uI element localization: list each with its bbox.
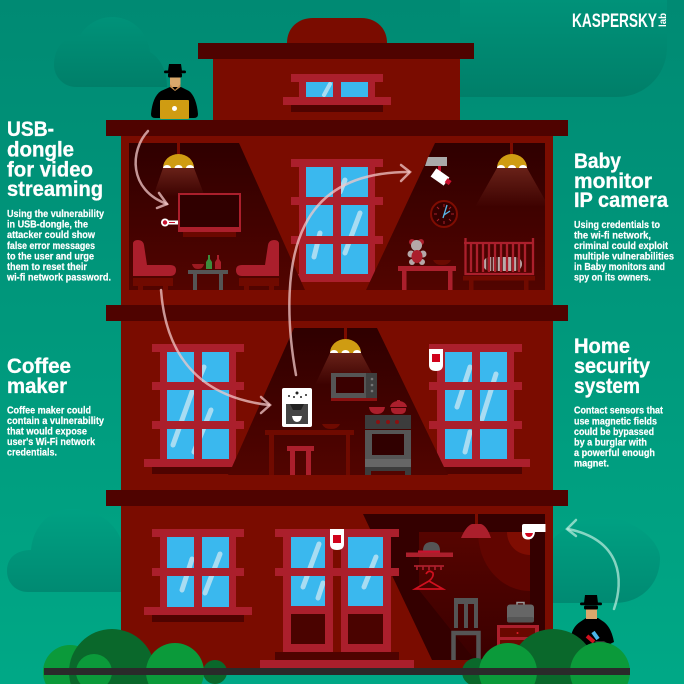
heading: coffee maker bbox=[7, 355, 71, 398]
text: home security description bbox=[574, 406, 664, 470]
text: baby monitor description bbox=[574, 220, 674, 284]
wall clock bbox=[431, 201, 457, 227]
roof dome bbox=[287, 18, 387, 43]
upper storey wall bbox=[213, 59, 460, 120]
right armchair bbox=[236, 240, 279, 290]
text: USB-dongle description: them to reset their bbox=[7, 262, 87, 273]
heading: USB-dongle: for video bbox=[7, 158, 93, 182]
window: middle floor left bbox=[144, 344, 252, 474]
text: baby monitor description: the wi-fi network, bbox=[574, 230, 651, 242]
heading: coffee maker: maker bbox=[7, 375, 67, 398]
icon: ip camera bbox=[425, 157, 452, 186]
coat rack bbox=[414, 566, 444, 589]
crib bbox=[463, 238, 535, 290]
icon: door sensor bbox=[330, 529, 344, 550]
cloud: top right bbox=[460, 0, 667, 97]
stool bbox=[287, 446, 314, 475]
text: coffee maker description: that would expose bbox=[7, 426, 88, 438]
text: home security description: use magnetic fields bbox=[574, 416, 657, 428]
stove with pots bbox=[365, 400, 411, 475]
text: USB-dongle description: attacker could show bbox=[7, 230, 95, 241]
nursery lamp bbox=[475, 143, 545, 207]
main wall bbox=[121, 135, 553, 670]
room: kitchen bbox=[228, 328, 448, 475]
heading: home security: system bbox=[574, 375, 640, 398]
chair bbox=[454, 598, 478, 660]
bushes: right bbox=[462, 629, 630, 684]
logo: lab bbox=[658, 13, 669, 27]
text: USB-dongle description: Using the vulnerability bbox=[7, 209, 105, 220]
text: baby monitor description: in Baby monitors and bbox=[574, 262, 665, 273]
arrow: tv to coffee maker bbox=[161, 290, 270, 413]
floor band 2 bbox=[106, 305, 568, 321]
arrow: burglar to sensor bbox=[567, 520, 619, 609]
text: baby monitor description: criminal could exploit bbox=[574, 241, 669, 252]
hacker: bottom with magnet bbox=[570, 595, 614, 647]
heading: baby monitor: IP camera bbox=[574, 189, 668, 212]
heading: home security: security bbox=[574, 355, 650, 378]
room: nursery bbox=[366, 143, 545, 290]
window: ground floor left bbox=[144, 529, 252, 622]
heading: baby monitor: Baby bbox=[574, 150, 621, 173]
heading: USB-dongle: streaming bbox=[7, 178, 103, 201]
cloud: top left bbox=[54, 17, 167, 87]
icon: window sensor bbox=[429, 349, 443, 371]
kitchen lamp bbox=[315, 328, 378, 385]
text: home security description: a powerful enough bbox=[574, 448, 655, 459]
hat shelf bbox=[406, 542, 453, 557]
text: baby monitor description: multiple vulnerabilities bbox=[574, 252, 674, 262]
hallway light core bbox=[507, 532, 530, 555]
hall lamp bbox=[461, 514, 491, 538]
heading: baby monitor bbox=[574, 150, 668, 212]
hacker: top with laptop bbox=[151, 64, 198, 119]
living room lamp bbox=[153, 143, 205, 197]
window: middle floor right bbox=[422, 344, 530, 474]
briefcase bbox=[507, 602, 534, 622]
room: hallway bbox=[363, 514, 545, 660]
heading: baby monitor: monitor bbox=[574, 170, 652, 193]
bushes: left bbox=[43, 629, 227, 684]
teddy bear bbox=[408, 239, 426, 265]
kitchen table bbox=[265, 424, 354, 475]
text: USB-dongle description bbox=[6, 209, 111, 284]
text: home security description: Contact sensors that bbox=[574, 406, 664, 417]
icon: coffee maker bbox=[282, 388, 312, 427]
floor band 3 bbox=[106, 490, 568, 506]
attic window bbox=[283, 74, 391, 112]
hallway light pool bbox=[478, 532, 530, 591]
hallway light patch bbox=[419, 532, 530, 660]
cloud: bottom left bbox=[7, 509, 121, 592]
door bbox=[260, 529, 414, 668]
heading: USB-dongle bbox=[7, 118, 103, 201]
text: home security description: magnet. bbox=[574, 458, 609, 470]
floor band 1 bbox=[106, 120, 568, 136]
television bbox=[178, 193, 241, 237]
heading: home security bbox=[574, 335, 650, 398]
icon: usb dongle bbox=[161, 218, 178, 226]
arrow: coffee maker to camera bbox=[289, 165, 410, 375]
cloud: bottom right bbox=[553, 518, 660, 603]
nursery table bbox=[398, 260, 456, 290]
text: coffee maker description: Coffee maker could bbox=[7, 406, 91, 417]
text: baby monitor description: Using credentials to bbox=[574, 220, 660, 231]
text: USB-dongle description: to the user and urge bbox=[7, 252, 95, 262]
text: USB-dongle description: false error messages bbox=[7, 241, 95, 252]
text: baby monitor description: spy on its owners. bbox=[574, 272, 651, 284]
heading: home security: Home bbox=[574, 335, 630, 358]
text: coffee maker description: credentials. bbox=[7, 448, 57, 458]
room: living room bbox=[129, 143, 305, 290]
text: home security description: could be bypassed bbox=[574, 427, 654, 438]
text: coffee maker description: contain a vulnerability bbox=[7, 416, 105, 427]
text: USB-dongle description: wi-fi network password. bbox=[6, 272, 111, 284]
heading: coffee maker: Coffee bbox=[7, 355, 71, 378]
text: coffee maker description bbox=[7, 406, 105, 458]
left armchair bbox=[133, 240, 176, 290]
text: coffee maker description: user's Wi-Fi network bbox=[7, 437, 96, 448]
drawer bbox=[497, 625, 539, 655]
base strip bbox=[44, 668, 630, 675]
arrow: hacker to tv bbox=[136, 131, 167, 208]
heading: USB-dongle: dongle bbox=[7, 138, 74, 162]
window: top floor centre bbox=[283, 159, 391, 282]
text: home security description: by a burglar with bbox=[574, 438, 647, 448]
microwave bbox=[331, 373, 377, 401]
coffee table with bottles bbox=[188, 255, 228, 290]
roof band bbox=[198, 43, 474, 59]
house bbox=[106, 18, 568, 670]
text: USB-dongle description: in USB-dongle, the bbox=[7, 220, 89, 230]
icon: contact sensor bbox=[522, 524, 546, 540]
heading: USB-dongle: USB- bbox=[7, 118, 54, 141]
